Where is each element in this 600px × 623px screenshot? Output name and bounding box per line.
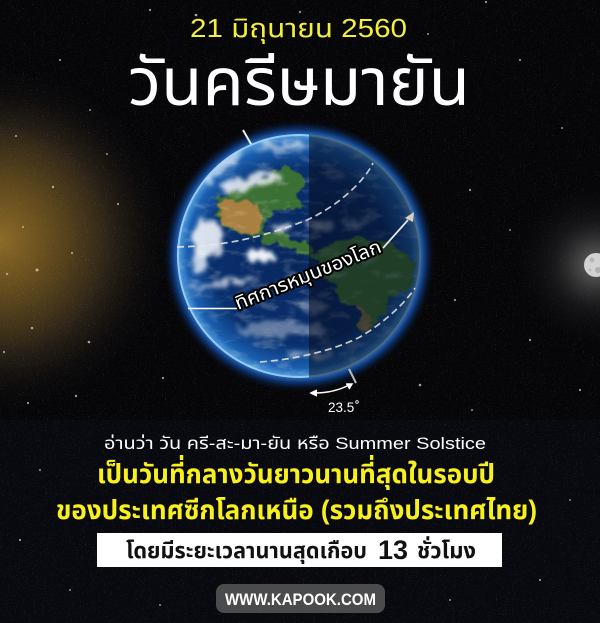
rotation arrow — [188, 212, 414, 308]
tropic of cancer dashed line — [177, 163, 373, 247]
website pill — [216, 584, 385, 613]
north america — [215, 165, 311, 255]
north axis tick — [243, 130, 251, 144]
website pill: WWW.KAPOOK.COM — [225, 591, 376, 609]
tropic of capricorn dashed line — [260, 288, 415, 362]
south america — [310, 238, 417, 333]
moon with glow — [510, 180, 600, 350]
tilt angle arrow — [311, 384, 352, 396]
sun glow — [0, 50, 180, 430]
white duration banner — [97, 533, 502, 567]
south axis tick — [349, 369, 356, 383]
yellow highlight line 2: ของประเทศซีกโลกเหนือ (รวมถึงประเทศไทย) — [56, 495, 537, 525]
date heading: 21 มิถุนายน 2560 — [190, 13, 407, 44]
white duration banner: โดยมีระยะเวลานานสุดเกือบ — [126, 538, 367, 564]
clouds — [187, 142, 372, 358]
atmosphere halo — [163, 120, 435, 392]
earth globe diagram — [163, 120, 435, 415]
pronunciation text: อ่านว่า วัน ครี-สะ-มา-ยัน หรือ Summer Solstice — [104, 434, 486, 453]
earth sphere — [177, 130, 424, 380]
main title: วันครีษมายัน — [128, 45, 470, 119]
tilt angle label: 23.5 — [328, 400, 354, 415]
white duration banner: ชั่วโมง — [417, 536, 476, 563]
rotation direction label: ทิศการหมุนของโลก — [232, 237, 385, 315]
white duration banner: 13 — [378, 535, 408, 565]
yellow highlight line 1: เป็นวันที่กลางวันยาวนานที่สุดในรอบปี — [97, 455, 495, 490]
night side shadow — [309, 130, 424, 380]
rim light — [178, 135, 420, 377]
